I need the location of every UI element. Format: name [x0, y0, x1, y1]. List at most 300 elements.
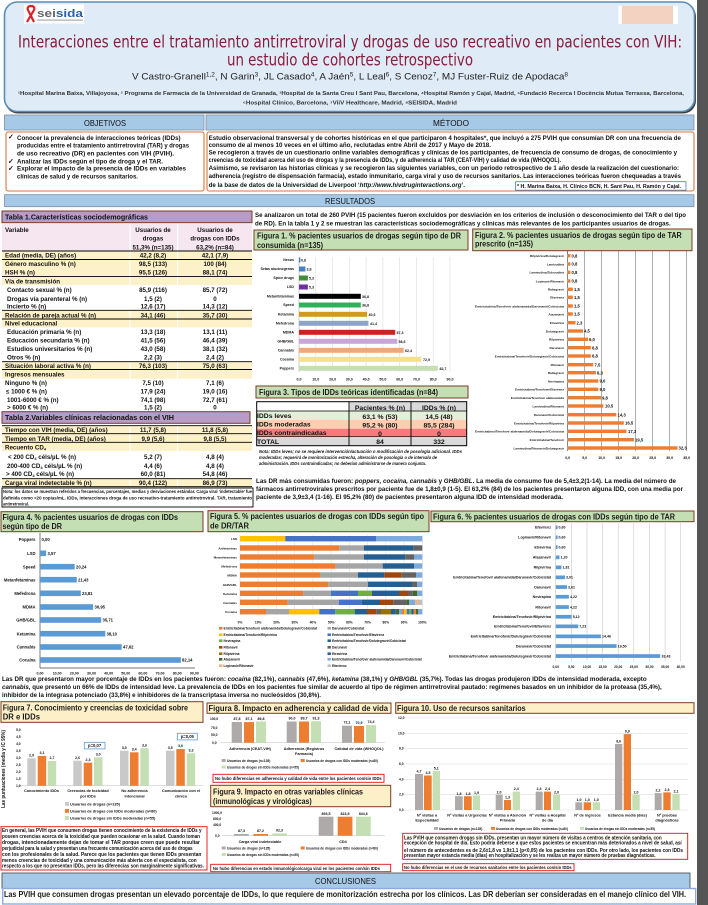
bar chart: figura 7: Conocimiento IDDs — [24, 789, 59, 793]
legend: figura 7 — [65, 802, 157, 820]
bar chart: figura 8: 87,1 — [246, 717, 252, 721]
legend: figura 5: Emtricitabina/Tenofovir alafenamida/Dolutegravir/Cobicistat — [224, 627, 318, 631]
legend: figura 5: Atazanavir — [224, 658, 241, 662]
legend: figura 10: Usuarios de drogas (n=135) — [439, 827, 482, 831]
text: consumo de drogas: fármacos antirretrovirales prescritos por paciente fue de 1,8±0,9 (1-5). El 63,2% (84) de los pacientes presentaron alguna IDD, con una media por — [256, 486, 684, 493]
bar chart: figura 2: Dolutegravir — [546, 329, 565, 333]
bar chart: figura 4: Ketamina — [17, 631, 36, 636]
bar chart: figura 8: Adherencia (CEAT-VIH) — [229, 747, 272, 751]
panel: objetivos: Conocer la prevalencia de interacciones teóricas (IDDs) — [17, 135, 181, 142]
results intro text — [255, 212, 686, 228]
table 2 rows: 4 — [44, 447, 47, 452]
bar chart: figura 4: 82,14 — [182, 658, 193, 663]
bar chart: figura 9: 823,9 — [340, 812, 350, 816]
bar chart: figura 1: 5,3 — [309, 276, 314, 280]
table 1 rows: 7,5 (10) — [142, 380, 164, 387]
bar chart: figura 4: 0,00 — [36, 672, 44, 676]
authors: , L Leal — [353, 72, 386, 82]
table 1 rows: 100 (84) — [203, 261, 227, 268]
table 1 rows: 1001-6000 € % (n) — [7, 397, 59, 404]
bar chart: figura 1: 41,4 — [370, 322, 377, 326]
table 1 column header: drogas con IDDs — [190, 236, 240, 242]
bar chart: figura 7: 3,5 — [122, 746, 127, 750]
table 1 rows: 76,3 (103) — [139, 363, 167, 370]
title — [18, 32, 682, 70]
bar chart: figura 6: 4,22 — [570, 605, 577, 609]
bar chart: figura 1: 72,9 — [423, 358, 430, 362]
callout: hospitales — [516, 182, 686, 190]
table: figura 3: 332 — [433, 439, 445, 446]
bar chart: figura 4: Cannabis — [17, 645, 36, 650]
bar chart: figura 8: 75,0 — [211, 726, 218, 730]
bar chart: figura 4: 80,00 — [173, 672, 182, 676]
table 2 rows: 11,8 (5,8) — [202, 427, 228, 434]
bar chart: figura 1: 90,0 — [446, 378, 454, 382]
bar chart: figura 1: 36,8 — [362, 295, 369, 299]
heading: resultados: RESULTADOS — [325, 196, 375, 206]
stacked bar chart: figura 5: 30% — [291, 620, 298, 624]
logo placeholder: pink block — [618, 6, 678, 24]
callout: sin diferencias recursos: No hubo diferencias en el uso de recursos sanitarios entre los pacientes con/sin IDDs — [404, 865, 572, 870]
bar chart: figura 2: Emtricitabina/Tenofovir/Dolutegravir/Cobicistat — [495, 354, 564, 358]
panel: método: Se recogieron a través de un cuestionario online variables demográficas y clínicas de los participantes, de frecuencia de consumo de drogas, de conocimiento y — [209, 149, 678, 156]
bar chart: figura 10: de día — [542, 818, 554, 822]
callout: conocimiento: con los profesionales de la salud. Parece que los pacientes que tienen IDDs presentan — [2, 852, 201, 858]
bar chart: figura 7: clínico — [175, 795, 188, 799]
bar chart: figura 1: 36,8 — [362, 304, 369, 308]
bar chart: figura 1: 50,0 — [379, 378, 386, 382]
bar chart: figura 1: Setas alucinógenas — [260, 267, 294, 271]
bar chart: figura 2: Darunavir/Cobicistat — [534, 413, 564, 417]
panel: header — [4, 2, 696, 114]
bar chart: figura 10: 8,6 — [616, 740, 621, 744]
table: figura 3: 0 — [378, 431, 382, 438]
bar chart: figura 6: 15,00 — [598, 665, 607, 669]
bar chart: figura 6: 1,81 — [562, 566, 570, 570]
callout: figura 10: excepción de hospital de día. Esto podría deberse a que estos pacientes se encuentran más deteriorados a nivel de salud, así — [404, 840, 682, 846]
bar chart: figura 2: Emtricitabina/Tenofovir/Efavirenz — [515, 388, 564, 392]
bar chart: figura 2: Lamivudina — [547, 262, 564, 266]
bar chart: figura 4: Cocaína — [19, 658, 36, 663]
bar chart: figura 4: 20,00 — [70, 672, 79, 676]
text: consumo de drogas — [256, 478, 684, 501]
bar chart: figura 7: 5,0 — [16, 728, 21, 732]
bar chart: figura 4: GHB/GBL — [16, 618, 36, 623]
bar chart: figura 2: Etravirina — [550, 321, 564, 325]
bar chart: figura 4: 70,00 — [156, 672, 164, 676]
table 1 rows: Drogas vía parenteral % (n) — [7, 296, 87, 303]
authors: , S Cenoz — [389, 72, 433, 82]
heading: figura 1: Figura 1. % pacientes usuarios de drogas según tipo de DR — [257, 232, 461, 241]
bar chart: figura 4: MDMA — [22, 605, 36, 610]
authors: , JL Casado — [258, 72, 311, 82]
bar chart: figura 2: 8,3 — [597, 370, 603, 375]
table 1 column header: Variable — [5, 227, 29, 234]
bar chart: figura 9: 87,3 — [238, 829, 245, 833]
bar chart: figura 4: 50,00 — [121, 672, 130, 676]
heading: figura 5 — [208, 511, 429, 532]
bar chart: figura 10: Primaria — [500, 818, 516, 822]
bar chart: figura 10: 8,0 — [399, 747, 404, 751]
bar chart: figura 1: Ketamina — [278, 312, 295, 316]
heading: objetivos: OBJETIVOS — [84, 118, 126, 128]
bar chart: figura 2: 1,5 — [574, 287, 580, 292]
table 2 rows: céls/µL % (n) — [35, 471, 74, 478]
affiliations: ⁶Hospital Clínico, Barcelona, ⁷ViiV Healthcare, Madrid, ⁸SEISIDA, Madrid — [243, 100, 457, 106]
bar chart: figura 8: Farmacia) — [295, 752, 314, 756]
bar chart: figura 9: 1000,0 — [212, 811, 222, 815]
table 2 rows: 4,8 (4) — [206, 463, 224, 470]
bar chart: figura 8: 90,0 — [288, 717, 296, 721]
bar chart: figura 1: 82,7 — [440, 367, 446, 371]
bar chart: figura 1: Cocaína — [280, 358, 295, 362]
panel: método: Estudio observacional transversal y de cohortes históricas en el que participaron 4 hospitales*, que incluyó a 275 PVIH que consumían DR con una frecuencia de — [209, 135, 682, 142]
heading: figura 2 — [473, 229, 692, 251]
bar chart: figura 4: Mefedrona — [14, 591, 36, 596]
legend: figura 5: Emtricitabina/Tenofovir/Efavirenz — [332, 633, 385, 637]
bar chart: figura 2: 0,8 — [572, 270, 578, 275]
bar chart: figura 2: Emtricitabina/Tenofovir — [530, 438, 565, 442]
bar chart: figura 7: 4,0 — [16, 742, 21, 746]
panel: tabla 1 y tabla 2 — [2, 211, 253, 507]
table 1 rows: 75,0 (63) — [203, 363, 227, 370]
bar chart: figura 10: 1,0 — [594, 798, 599, 802]
heading: figura 10: Figura 10. Uso de recursos sanitarios — [397, 704, 526, 713]
bar chart: figura 6: Etravirina — [534, 545, 552, 549]
bar chart: figura 10: Nº visitas a Atención — [489, 814, 527, 818]
bar chart: figura 7: 2,9 — [29, 754, 34, 758]
p-value callouts: p=0,05 — [181, 734, 195, 739]
table 1 rows: Ninguno % (n) — [5, 380, 47, 387]
figura 3 note: moderadas; requerirá de monitorización estrecha, alteración de posología o de intervalo de — [259, 455, 437, 460]
bar chart: figura 2: Lopinavir/Ritonavir — [536, 279, 565, 283]
callout: figura 10 — [403, 833, 688, 859]
text: DR con mayor porcentaje de IDDs: Las DR que presentaron mayor porcentaje de IDDs en los pacientes fueron: cocaína (82,1%), cannabis (47,6%), ketamina (38,1%) y GHB/GBL (35,7%). Todas las drogas produjeron IDDs de intensidad moderada, excepto — [2, 676, 647, 683]
bar chart: figura 1: Speed — [283, 303, 294, 307]
bar chart: figura 6: 0,60 — [558, 545, 566, 549]
bar chart: figura 2: 32,3 — [678, 446, 687, 451]
authors: 8 — [564, 72, 569, 78]
affiliations — [18, 91, 685, 106]
authors: , A Jaén — [314, 72, 350, 82]
bar chart: figura 6: 30,00 — [645, 665, 654, 669]
legend: figura 5: Darunavir — [332, 646, 348, 650]
bar chart: figura 8: 89,7 — [300, 717, 308, 721]
panel: objetivos — [6, 132, 204, 191]
bar chart: figura 1: Nexus — [283, 258, 294, 262]
table 1 rows: 13,1 (11) — [203, 329, 227, 336]
bar chart: figura 10: Nº visitas a Urgencias — [447, 814, 487, 818]
bar chart: figura 6: 0,60 — [558, 526, 566, 530]
table: figura 3: IDDs % (n) — [422, 405, 456, 412]
table note: Nota: los datos se muestran referidos a frecuencias, porcentajes, medias y desviaciones estándar. Carga viral ‘indetectable’ fue — [3, 489, 253, 494]
panel: conclusiones text — [3, 888, 696, 904]
table 2 rows: 9,8 (5,5) — [203, 436, 227, 443]
bar chart: figura 6: 1,20 — [560, 556, 568, 560]
bar chart: figura 6: Emtricitabina/Tenofovir alafenamida/Darunavir/Cobicistat — [453, 576, 552, 580]
table 1 rows: Relación de pareja actual % (n) — [5, 312, 96, 319]
bar chart: figura 7: 3,4 — [132, 748, 137, 752]
panel: objetivos: clínicas de salud y de recursos sanitarios. — [17, 173, 138, 180]
bar chart: figura 6: Darunavir — [534, 585, 552, 589]
table 1 rows: 72,7 (61) — [203, 397, 227, 404]
table 2 rows: Tiempo en TAR (media, DE) (años) — [5, 436, 106, 443]
bar chart: figura 4: 30,95 — [94, 605, 106, 610]
callout: figura 8: No hubo diferencias en adherencia y calidad de vida entre los pacientes con/sin IDDs — [215, 776, 382, 781]
table: figura 3: Pacientes % (n) — [355, 405, 405, 412]
stacked bar chart: figura 5: 60% — [346, 620, 353, 624]
bar chart: figura 7: Intencional — [124, 795, 145, 799]
table 1 column header: Usuarios de — [135, 227, 171, 234]
bar chart: figura 4: 20,24 — [76, 564, 87, 569]
panel: objetivos: de uso recreativo (DR) en pacientes con VIH (PVIH). — [17, 150, 174, 157]
heading: tabla 2: Tabla 2.Variables clínicas relacionadas con el VIH — [5, 413, 174, 422]
results intro text: Se analizaron un total de 260 PVIH (15 pacientes fueron excluidos por desviación en los criterios de inclusión o desconocimiento del TAR o del tipo — [255, 212, 686, 219]
bar chart: figura 6: Emtricitabina/Tenofovir alafenamida/Dolutegravir/Cobicistat — [449, 654, 552, 658]
panel: objetivos: producidas entre el tratamiento antirretroviral (TAR) y drogas — [17, 143, 190, 150]
bar chart: figura 8: 100,0 — [210, 717, 218, 721]
table 1 rows: 7,1 (6) — [206, 380, 224, 387]
bar chart: figura 2: 9,0 — [600, 387, 606, 392]
table 1 rows: Estudios universitarios % (n) — [7, 346, 92, 353]
table 1 rows: 1,5 (2) — [144, 296, 162, 303]
table 1 rows: Educación primaria % (n) — [7, 329, 81, 336]
heading: tabla 1: Tabla 1.Características sociodemográficas — [5, 212, 148, 221]
bar chart: figura 6: 3,61 — [568, 585, 575, 589]
panel: método — [207, 132, 694, 191]
bar chart: figura 2: Emtricitabina/Tenofovir alafenamida/Dolutegravir/Cobicistat — [475, 430, 564, 434]
bar chart: figura 10: Nº pruebas — [657, 814, 677, 818]
table 2 rows: < 200 CD — [8, 454, 34, 461]
table 2 rows: céls/µL % (n) — [37, 454, 76, 461]
bar chart: figura 1: 70,0 — [413, 378, 420, 382]
bar chart: figura 1: 0,8 — [301, 258, 306, 262]
bar chart: figura 1: 30,0 — [346, 378, 353, 382]
text: DR con mayor porcentaje de IDDs — [2, 676, 662, 699]
table 1 rows: Género masculino % (n) — [5, 261, 76, 268]
results intro text: de RD). En la tabla 1 y 2 se muestran las características sociodemográficas y clínicas más relevantes de los participantes usuarios de drogas. — [255, 221, 671, 228]
bar chart: figura 6: Darunavir/Cobicistat — [516, 644, 552, 648]
bar chart: figura 7: 2,3 — [86, 758, 90, 762]
bar chart: figura 8 — [210, 717, 385, 770]
callout: conocimiento — [1, 827, 207, 870]
bar chart: figura 1: 62,4 — [405, 349, 412, 353]
legend: figura 5: Darunavir/Cobicistat — [332, 627, 365, 631]
panel: objetivos: ✓ — [8, 166, 14, 172]
bar chart: figura 6: 35,00 — [661, 665, 669, 669]
heading: tabla 1 — [2, 211, 252, 223]
bar chart: figura 6: 10,00 — [583, 665, 591, 669]
stacked bar chart: figura 5: 0% — [238, 620, 242, 624]
bar chart: figura 10: 2,0 — [634, 790, 638, 794]
heading: figura 3: Figura 3. Tipos de IDDs teóricas identificadas (n=84) — [259, 388, 438, 397]
bar chart: figura 6: 19,50 — [618, 644, 627, 648]
bar chart: figura 4: 0,00 — [42, 537, 50, 542]
table 2 rows: 4,8 (4) — [206, 454, 224, 461]
bar chart: figura 4: 21,43 — [78, 577, 89, 582]
bar chart: figura 10: 9,9 — [625, 730, 630, 734]
table 1 rows: 41,5 (56) — [141, 338, 165, 345]
stacked bar chart: figura 5: 100% — [418, 620, 427, 624]
dark right margin strip — [697, 0, 708, 905]
bar chart: figura 1: Metanfetaminas — [267, 294, 294, 298]
bar chart: figura 10: 2,0 — [399, 793, 404, 797]
bar chart: figura 9: CD4 — [339, 840, 348, 844]
table: figura 3 — [257, 402, 467, 446]
legend: figura 9: Usuarios de drogas sin IDDs moderadas (n=55) — [227, 853, 299, 857]
bar chart: figura 4: Metanfetaminas — [4, 577, 36, 582]
bar chart: figura 10: 0,0 — [399, 808, 404, 812]
legend: figura 9: Usuarios de drogas con IDDs moderadas (n=80) — [306, 846, 378, 850]
bar chart: figura 9: 844,6 — [359, 812, 368, 816]
authors: , MJ Fuster-Ruiz de Apodaca — [436, 72, 565, 82]
table: figura 3: IDDs moderadas — [257, 422, 311, 429]
legend: figura 5: Nevirapina — [224, 639, 241, 643]
bar chart: figura 1: GHB/GBL — [277, 340, 295, 344]
bar chart: figura 2: 19,5 — [635, 437, 644, 442]
bar chart: figura 2: 5,0 — [582, 456, 587, 460]
bar chart: figura 2: Atazanavir — [548, 312, 565, 316]
bar chart: figura 2: Raltegravir — [548, 371, 565, 375]
legend: figura 9 — [222, 846, 378, 857]
bar chart: figura 4: 38,10 — [106, 631, 118, 636]
table 1 rows — [5, 253, 228, 412]
stacked bar chart: figura 5: Mefedrona — [221, 564, 237, 568]
table: figura 3: 84 — [376, 439, 384, 446]
bar chart: figura 1: 5,3 — [309, 286, 314, 290]
bar chart: figura 7: 2,5 — [16, 763, 21, 767]
heading: figura 2: Figura 2. % pacientes usuarios de drogas según tipo de TAR — [475, 231, 682, 240]
stacked bar chart: figura 5: Cannabis — [223, 601, 237, 605]
bar chart: figura 7: 3,1 — [40, 751, 44, 755]
table 2 rows: 90,4 (122) — [139, 480, 167, 487]
bar chart: figura 10: Estancia media (días) — [608, 814, 648, 818]
bar chart: figura 2: 0,8 — [572, 253, 578, 258]
bar chart: figura 1: Poppers — [280, 366, 294, 370]
bar chart: figura 1: Cannabis — [278, 348, 294, 352]
heading: conclusiones — [2, 873, 690, 888]
bar chart: figura 4: 40,00 — [104, 672, 113, 676]
bar chart: figura 2: 0,8 — [572, 279, 578, 284]
bar chart: figura 10: 2,4 — [536, 787, 542, 791]
table 2 rows: 9,9 (5,6) — [141, 436, 165, 443]
bar chart: figura 10: 2,4 — [545, 787, 550, 791]
bar chart: figura 6: 5,00 — [568, 665, 575, 669]
table 2 rows: 54,8 (46) — [203, 471, 227, 478]
table 1 rows: 12,6 (17) — [141, 304, 165, 311]
bar chart: figura 9: 400,0 — [213, 823, 221, 827]
table 1 rows: Situación laboral activa % (n) — [5, 363, 91, 370]
heading: figura 2: prescrito (n=135) — [475, 240, 533, 249]
bar chart: figura 10 — [398, 716, 688, 831]
table: figura 3: 63,1 % (53) — [362, 414, 398, 421]
heading: método: MÉTODO — [433, 118, 469, 128]
bar chart: figura 2: 25,0 — [649, 456, 656, 460]
table: figura 3: 85,5 (284) — [424, 423, 454, 430]
table 1 column header — [2, 224, 252, 251]
table: figura 3: IDDs contraindicadas — [257, 430, 327, 437]
table 2 rows: Tiempo con VIH (media, DE) (años) — [5, 427, 108, 434]
table 2 rows: 4 — [34, 456, 37, 461]
callout: conocimiento: perjudicial para la salud y presentan una frecuente comunicación acerca del uso de drogas — [2, 846, 193, 852]
bar chart: figura 2: 7,5 — [594, 362, 601, 367]
callout: conocimiento: menos creencias de toxicidad y una comunicación más abierta con el especialista, con — [2, 858, 197, 864]
bar chart: figura 7: Comunicación con el — [162, 789, 200, 793]
table 1 column header: drogas — [143, 236, 164, 242]
bar chart: figura 2 — [475, 251, 690, 460]
heading: figura 4: según tipo de DR — [2, 522, 62, 531]
callout: conocimiento: respecto a los que no presentan IDDs, pero las diferencias son marginalmente significativas. — [2, 864, 205, 870]
bar chart: figura 8: 89,8 — [258, 717, 264, 721]
legend: figura 10 — [434, 827, 655, 831]
panel: objetivos: Explorar el impacto de la presencia de IDDs en variables — [17, 166, 187, 173]
heading: figura 1: consumida (n=135) — [257, 241, 323, 250]
table 1 rows: 2,4 (2) — [206, 354, 224, 361]
table: figura 3: 14,5 (48) — [425, 414, 453, 421]
bar chart: figura 8: Calidad de vida (WHOQOL) — [335, 747, 384, 751]
bar chart: figura 9: 87,2 — [257, 829, 264, 833]
bar chart: figura 2: Nevirapina — [548, 379, 564, 383]
bar chart: figura 2: 20,0 — [632, 456, 639, 460]
legend: figura 7: Usuarios de drogas con IDDs moderadas (n=80) — [70, 810, 157, 814]
legend: figura 7: Usuarios de drogas sin IDDs moderadas (n=55) — [70, 816, 156, 820]
bar chart: figura 7: Creencias de toxicidad — [67, 789, 109, 793]
bar chart: figura 7: 1,5 — [16, 777, 21, 781]
bar chart: figura 6: Efavirenz — [535, 526, 551, 530]
callout: conocimiento: drogas, intencionadamente dejan de tomar el TAR porque creen que puede resultar — [2, 840, 200, 846]
bar chart: figura 8: Adherencia (Registros — [284, 747, 324, 751]
bar chart: figura 2: 1,5 — [574, 312, 580, 317]
bar chart: figura 4: LSD — [27, 551, 36, 556]
table 1 column header: 51,3% (n=135) — [132, 244, 174, 251]
heading: objetivos — [4, 115, 204, 130]
callout: figura 8 — [213, 774, 384, 782]
bar chart: figura 6: Emtricitabina/Tenofovir/Rilpivirina — [493, 615, 552, 619]
stacked bar chart: figura 5: 40% — [310, 620, 316, 624]
text: DR con mayor porcentaje de IDDs: cannabis, que presentó un 66% de IDDs de intensidad leve. La prevalencia de IDDs en los pacientes fue similar de acuerdo al tipo de régimen antirretroviral pautado: regímenes basados en un inhibidor de la proteasa (35,4%), — [2, 684, 662, 691]
bar chart: figura 7: 3,5 — [16, 749, 21, 753]
bar chart: figura 4: 47,62 — [123, 645, 134, 650]
heading: resultados — [4, 195, 694, 207]
table 1 rows: 14,3 (12) — [203, 304, 227, 311]
table 1 rows: Incierto % (n) — [7, 304, 46, 311]
bar chart: figura 10: Especialidad — [415, 818, 439, 822]
bar chart: figura 1: 20,0 — [329, 378, 336, 382]
bar chart: figura 10: 1,3 — [505, 796, 510, 800]
bar chart: figura 6: 14,46 — [602, 635, 611, 639]
bar chart: figura 6: 7,23 — [579, 625, 586, 629]
stacked bar chart: figura 5: 80% — [382, 620, 389, 624]
bar chart: figura 8: 70,9 — [356, 721, 362, 725]
bar chart: figura 7: 2,0 — [16, 770, 21, 774]
bar chart: figura 1: 60,0 — [396, 378, 403, 382]
bar chart: figura 1: 58,6 — [398, 340, 406, 344]
bar chart: figura 1: 3,8 — [306, 268, 312, 272]
legend: figura 5: Rilpivirina — [224, 652, 240, 656]
bar chart: figura 6 — [449, 523, 685, 669]
heading: figura 7 — [1, 702, 203, 722]
table 1 rows: Otros % (n) — [7, 354, 40, 361]
bar chart: figura 4: 60,00 — [138, 672, 147, 676]
bar chart: figura 10: 1,9 — [474, 791, 479, 795]
bar chart: figura 2: 16,5 — [625, 421, 634, 426]
bar chart: figura 10: 4,7 — [416, 770, 422, 774]
bar chart: figura 7: por IDDs — [80, 795, 96, 799]
bar chart: figura 6: 33,43 — [662, 654, 670, 658]
bar chart: figura 1: LSD — [287, 285, 294, 289]
bar chart: figura 2: 10,0 — [598, 456, 605, 460]
bar chart: figura 10: 6,0 — [399, 762, 404, 766]
